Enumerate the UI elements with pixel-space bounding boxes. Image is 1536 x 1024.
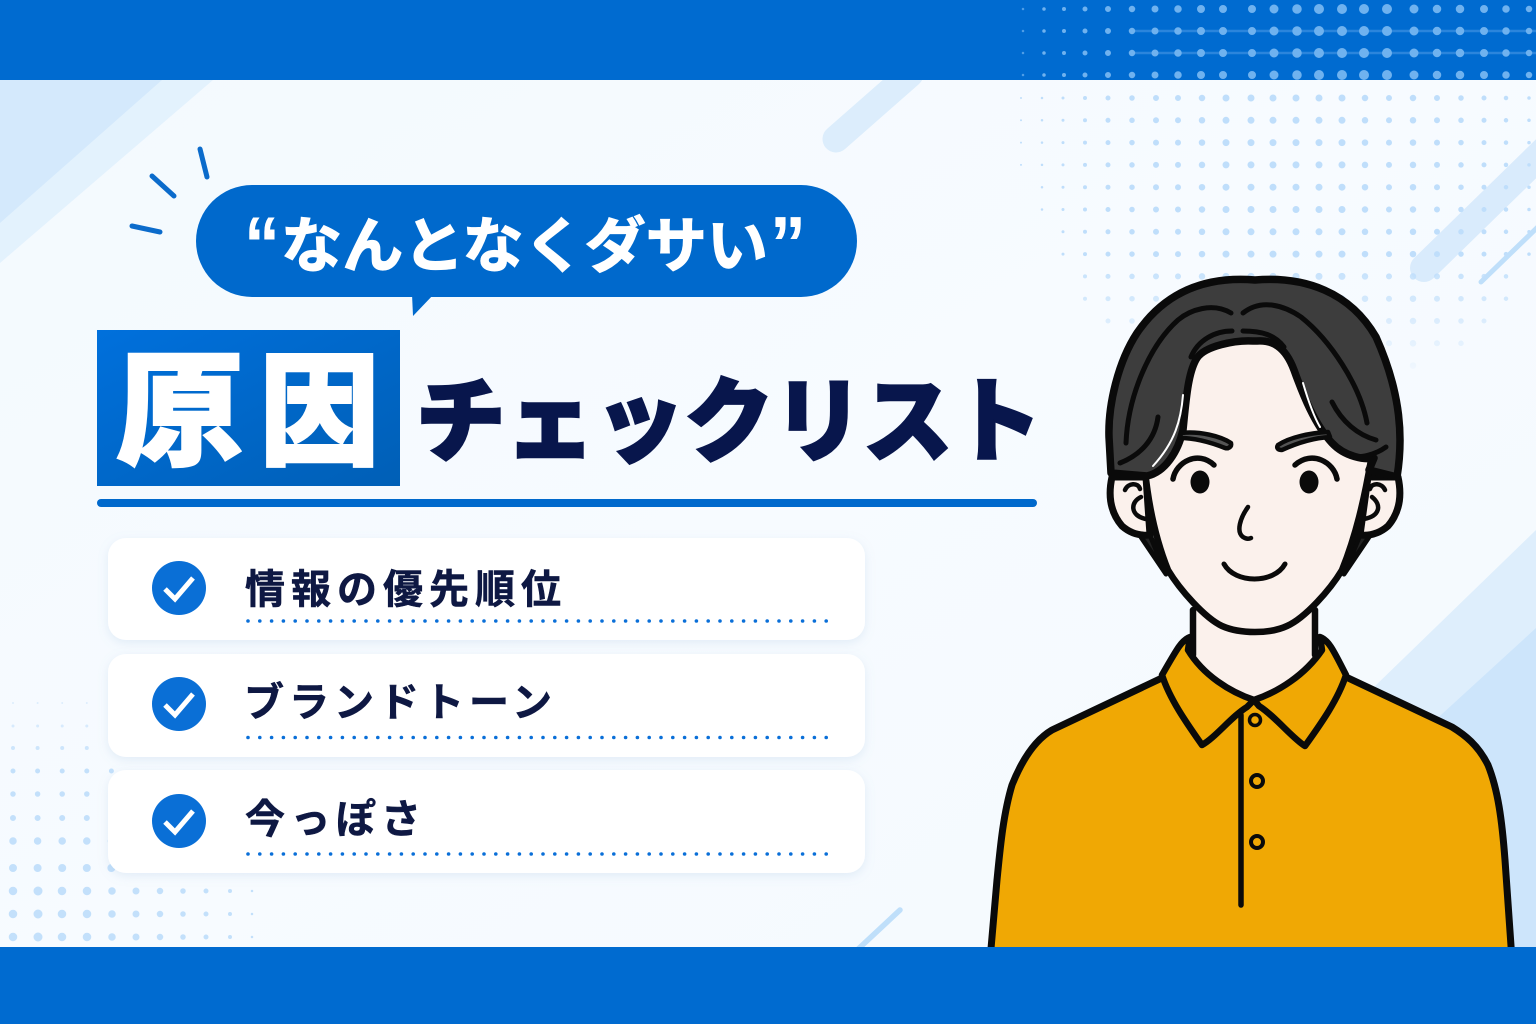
icon: emphasis spark lines — [132, 149, 207, 232]
jaw shadow behind ears — [1141, 535, 1369, 574]
footer band — [0, 947, 1536, 1024]
collar — [1162, 610, 1346, 746]
neck — [1193, 600, 1315, 699]
item text 2: ブランドトーン — [244, 681, 552, 725]
hair — [1109, 279, 1400, 477]
item text 3: 今っぽさ — [245, 798, 421, 842]
title: チェックリスト: チェックリスト — [416, 372, 1042, 474]
speech bubble: なんとなくダサい: なんとなくダサい — [281, 213, 768, 280]
title underline — [97, 499, 1037, 507]
title label box: 原因: 因 — [259, 344, 380, 482]
speech bubble: なんとなくダサい: “ — [244, 200, 280, 288]
header band — [0, 0, 1536, 80]
checklist item 2 — [108, 654, 865, 757]
item text 1: 情報の優先順位 — [245, 568, 561, 612]
mouth — [1224, 564, 1285, 579]
icon: check 2 — [152, 677, 206, 731]
checklist item 1 — [108, 538, 865, 640]
icon: check 1 — [152, 561, 206, 615]
nose — [1239, 507, 1251, 539]
shirt — [990, 677, 1512, 960]
checklist item 3 — [108, 770, 865, 873]
eyes — [1173, 458, 1337, 494]
title label box: 原因 — [97, 330, 400, 486]
illustration: man in yellow polo shirt — [990, 279, 1512, 960]
eyebrows — [1180, 432, 1330, 450]
icon: check 3 — [152, 794, 206, 848]
speech bubble: なんとなくダサい — [196, 185, 857, 316]
speech bubble: なんとなくダサい: ” — [770, 200, 806, 288]
ears — [1110, 477, 1400, 535]
title label box: 原因: 原 — [116, 344, 244, 482]
face — [1145, 325, 1371, 632]
